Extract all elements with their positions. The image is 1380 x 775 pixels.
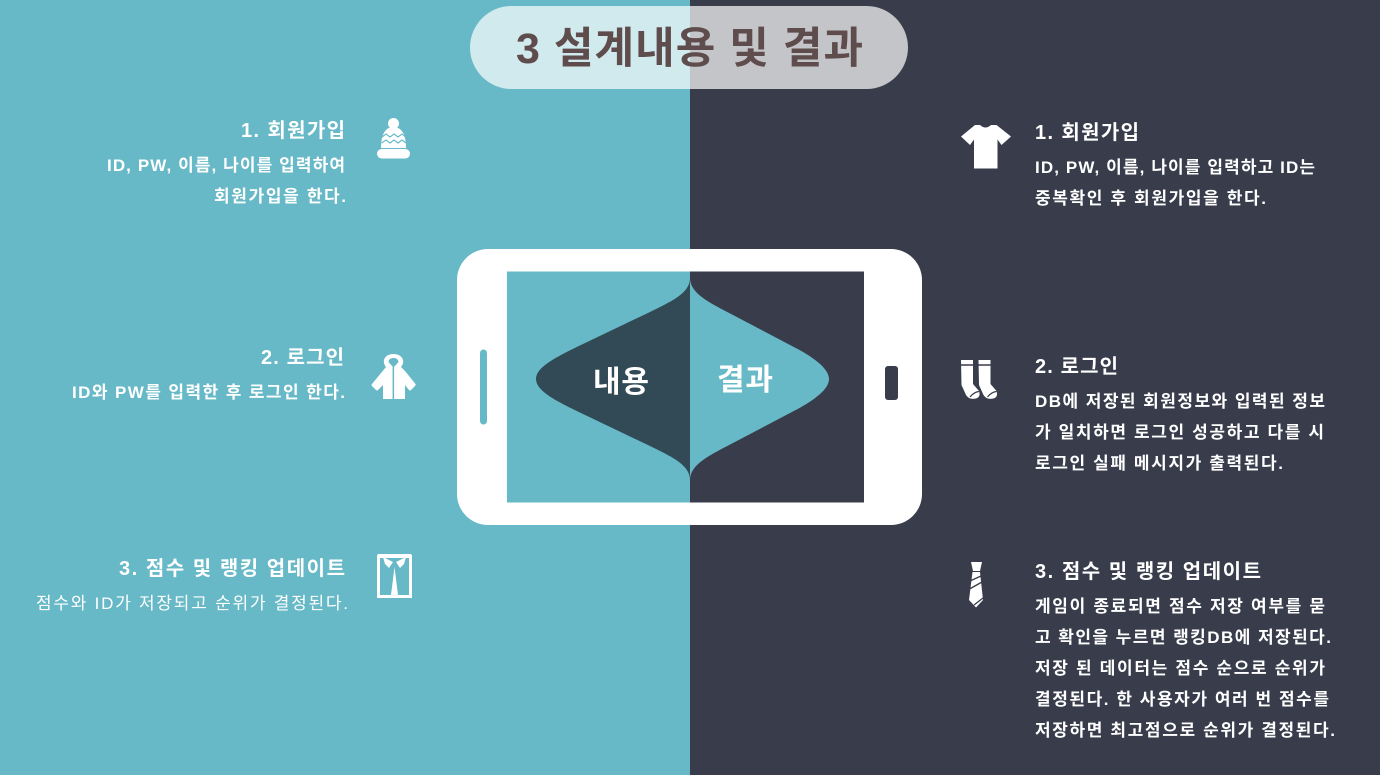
panel: left item 3 (36, 557, 348, 613)
panel: right item 2 (1035, 355, 1325, 473)
panel: right item 3: 저장 된 데이터는 점수 순으로 순위가 (1035, 659, 1325, 678)
panel: right item 3: 3. 점수 및 랭킹 업데이트 (1035, 560, 1261, 583)
left teal background (0, 0, 690, 775)
panel: left item 1: ID, PW, 이름, 나이를 입력하여 (107, 156, 345, 175)
panel: right item 1: ID, PW, 이름, 나이를 입력하고 ID는 (1035, 158, 1315, 177)
icon: socks (960, 360, 997, 399)
panel: right item 1: 중복확인 후 회원가입을 한다. (1035, 189, 1266, 208)
right home button (885, 366, 898, 400)
bell shape: result (690, 279, 829, 479)
panel: right item 2: 로그인 실패 메시지가 출력된다. (1035, 454, 1283, 473)
panel: right item 3 (1035, 560, 1335, 740)
panel: right item 2: DB에 저장된 회원정보와 입력된 정보 (1035, 392, 1325, 411)
panel: left item 2: 2. 로그인 (261, 346, 344, 369)
panel: right item 2: 2. 로그인 (1035, 355, 1118, 378)
panel: left item 1: 회원가입을 한다. (214, 187, 346, 206)
title pill: 3 설계내용 및 결과 (516, 25, 863, 73)
panel: right item 2: 가 일치하면 로그인 성공하고 다를 시 (1035, 423, 1324, 442)
panel: left item 2: ID와 PW를 입력한 후 로그인 한다. (72, 383, 345, 402)
screen right half (690, 272, 864, 502)
left speaker bar (480, 350, 487, 424)
icon: knit hat (377, 118, 410, 158)
panel: left item 3: 3. 점수 및 랭킹 업데이트 (119, 557, 345, 580)
icon: hooded jacket (372, 354, 416, 399)
phone body (457, 249, 922, 525)
panel: right item 3: 게임이 종료되면 점수 저장 여부를 묻 (1035, 597, 1325, 616)
panel: left item 1: 1. 회원가입 (241, 119, 345, 142)
panel: right item 3: 고 확인을 누르면 랭킹DB에 저장된다. (1035, 628, 1331, 647)
panel: right item 1 (1035, 121, 1315, 208)
icon: dress shirt (377, 554, 412, 598)
icon: t-shirt (961, 125, 1011, 168)
panel: left item 1 (107, 119, 346, 206)
icon: striped necktie (969, 562, 983, 608)
title pill (470, 6, 908, 89)
bell shape: content (536, 279, 690, 479)
label: content: 내용 (593, 366, 649, 399)
phone illustration (457, 249, 922, 525)
panel: left item 2 (72, 346, 345, 402)
right dark background (690, 0, 1380, 775)
panel: left item 3: 점수와 ID가 저장되고 순위가 결정된다. (36, 594, 348, 613)
screen left half (507, 272, 690, 502)
label: result: 결과 (717, 364, 773, 397)
panel: right item 3: 저장하면 최고점으로 순위가 결정된다. (1035, 721, 1335, 740)
panel: right item 1: 1. 회원가입 (1035, 121, 1139, 144)
panel: right item 3: 결정된다. 한 사용자가 여러 번 점수를 (1035, 690, 1329, 709)
